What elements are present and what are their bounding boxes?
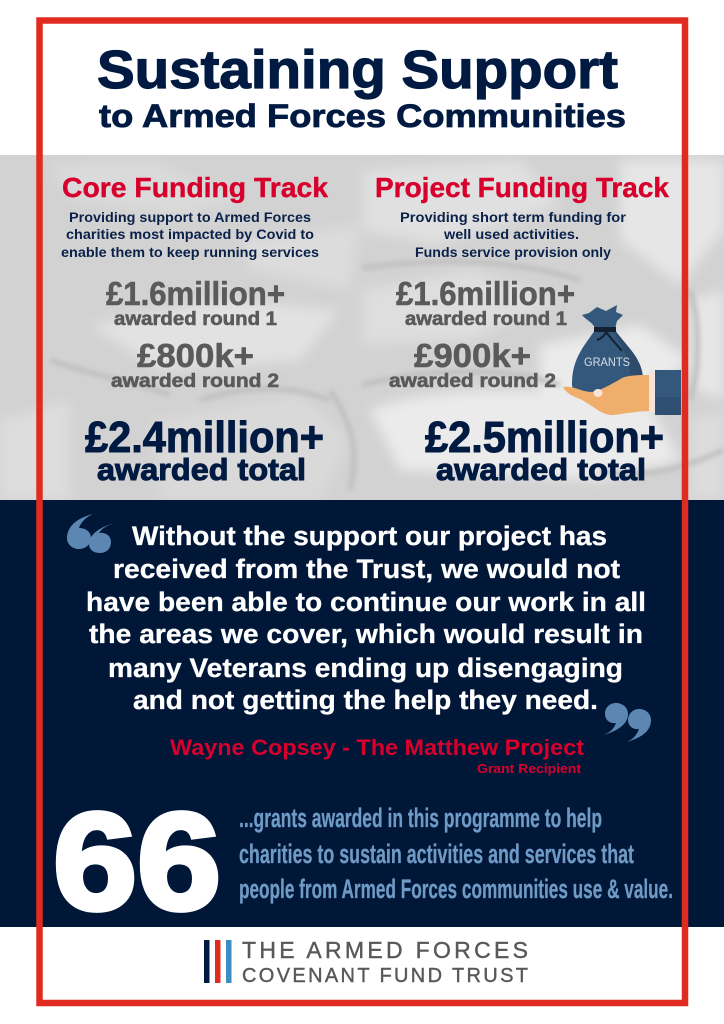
panel: quote and statistic navy background xyxy=(0,500,724,927)
stat: project round 2 xyxy=(389,337,556,392)
stat: project round 2: awarded round 2 xyxy=(389,371,556,392)
text block: testimonial attribution xyxy=(170,735,585,776)
text block: testimonial quote: have been able to continue our work in all xyxy=(86,587,646,617)
text block: testimonial quote: received from the Trust, we would not xyxy=(113,554,620,584)
logo: the armed forces covenant fund trust: COVENANT FUND TRUST xyxy=(242,965,528,987)
stat: core round 1: £1.6million+ xyxy=(106,275,285,312)
title xyxy=(97,40,626,134)
icon: hand holding grants bag xyxy=(563,305,681,415)
text block: project funding description: well used activities. xyxy=(443,227,579,242)
text block: project funding description: Funds service provision only xyxy=(415,245,612,260)
stat: core total xyxy=(85,413,324,487)
text block: project funding description xyxy=(400,210,627,260)
text block: testimonial quote: the areas we cover, which would result in xyxy=(89,619,643,649)
text block: testimonial quote xyxy=(86,521,646,715)
panel: sandbag photo background xyxy=(0,155,724,500)
stat: project round 1 xyxy=(396,275,575,330)
icon: hand holding grants bag: GRANTS xyxy=(584,355,630,369)
text block: core funding description: enable them to keep running services xyxy=(61,245,319,260)
text block: grants description xyxy=(239,803,673,904)
stat: core round 2: awarded round 2 xyxy=(111,371,279,392)
heading: project funding track: Project Funding Track xyxy=(375,172,669,203)
icon: closing quotation mark xyxy=(604,703,651,742)
stat: project round 1: £1.6million+ xyxy=(396,275,575,312)
text block: testimonial attribution: Wayne Copsey - The Matthew Project xyxy=(170,735,585,760)
stat: project round 1: awarded round 1 xyxy=(405,309,567,330)
stat: project total: £2.5million+ xyxy=(425,413,664,462)
stat: core round 1: awarded round 1 xyxy=(114,309,277,330)
stat: core round 2: £800k+ xyxy=(137,337,254,374)
stat: project total xyxy=(425,413,664,487)
text block: core funding description xyxy=(61,210,319,260)
text block: core funding description: Providing support to Armed Forces xyxy=(69,210,311,225)
stat: project total: awarded total xyxy=(436,452,646,487)
text block: testimonial attribution: Grant Recipient xyxy=(477,762,582,776)
stat: core total: £2.4million+ xyxy=(85,413,324,462)
stat: core round 1 xyxy=(106,275,285,330)
title: to Armed Forces Communities xyxy=(99,98,626,134)
text block: core funding description: charities most impacted by Covid to xyxy=(66,227,314,242)
stat: core round 2 xyxy=(111,337,279,392)
stat: project round 2: £900k+ xyxy=(414,337,531,374)
icon: opening quotation mark xyxy=(67,514,115,553)
text block: testimonial quote: and not getting the help they need. xyxy=(133,685,598,715)
text block: project funding description: Providing short term funding for xyxy=(400,210,627,225)
stat: 66 grants: 66 xyxy=(53,785,221,939)
text block: testimonial quote: many Veterans ending up disengaging xyxy=(108,653,623,683)
stat: core total: awarded total xyxy=(97,452,306,487)
title: Sustaining Support xyxy=(97,40,618,100)
logo: the armed forces covenant fund trust: THE ARMED FORCES xyxy=(242,937,528,963)
panel: core funding track xyxy=(61,172,328,487)
heading: core funding track: Core Funding Track xyxy=(62,172,328,203)
text block: testimonial quote: Without the support our project has xyxy=(132,521,607,551)
logo: the armed forces covenant fund trust xyxy=(204,937,528,987)
panel: project funding track xyxy=(375,172,669,487)
